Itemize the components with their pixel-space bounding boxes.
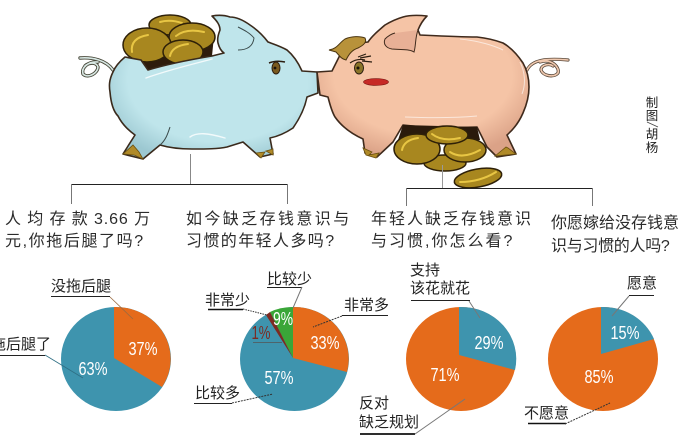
pink pig tail	[527, 59, 568, 76]
pie 2 label: many: 比较多	[195, 384, 240, 402]
blue pig ear line	[160, 27, 254, 145]
pie chart 2	[240, 307, 349, 411]
question 4: 识与习惯的人吗?	[551, 237, 670, 255]
pink pig ear line	[384, 30, 418, 52]
pie 2 label: very few	[205, 292, 267, 315]
pie 3 label: oppose: 缺乏规划	[359, 414, 419, 431]
credit: illustrator: 杨	[646, 140, 658, 155]
pie chart 3: 71%	[430, 365, 460, 385]
credit: illustrator: 胡	[646, 128, 658, 142]
bracket: right connector	[406, 165, 593, 206]
pie chart 2: 33%	[310, 333, 340, 353]
pie chart 2: 9%	[273, 309, 293, 329]
pie 2 label: many	[194, 384, 273, 404]
pie 2 label: very many: 非常多	[344, 297, 389, 314]
pink pig eye	[350, 54, 372, 74]
question 3: 与习惯,你怎么看?	[371, 232, 514, 250]
pie 4 label: willing: 愿意	[627, 274, 657, 292]
pie 3 label: support: 支持	[410, 262, 440, 279]
blue pig body	[109, 15, 318, 159]
pink pig body	[317, 15, 529, 157]
blue pig highlights	[146, 59, 225, 138]
pink pig coins	[394, 126, 503, 191]
blue pig hooves	[123, 145, 273, 159]
pink pig hair	[329, 37, 366, 60]
pie 1 label: not behind: 没拖后腿	[51, 278, 111, 295]
question 1: 元,你拖后腿了吗?	[5, 232, 145, 250]
question 4: 你愿嫁给没存钱意	[551, 213, 679, 232]
pie chart 1: 63%	[78, 359, 108, 379]
pie 2 label: few: 比较少	[267, 270, 312, 288]
question 2: 习惯的年轻人多吗?	[186, 232, 336, 250]
icon: blue piggy bank	[80, 15, 318, 159]
pie 3 label: support	[410, 262, 480, 318]
question 3: 年轻人缺乏存钱意识	[371, 209, 533, 228]
pie 4 label: willing	[612, 274, 657, 316]
pie 2 label: very few: 非常少	[205, 292, 250, 309]
pie 3 label: support: 该花就花	[410, 280, 470, 297]
icon: pink piggy bank	[317, 15, 568, 191]
pie chart 3	[406, 307, 516, 411]
pie chart 4: 85%	[584, 367, 614, 387]
pie chart 2: 57%	[264, 368, 294, 388]
pie 4 label: unwilling	[524, 403, 610, 424]
pie 2 label: few	[267, 270, 312, 308]
pink pig coin cavity	[398, 125, 480, 140]
credit: illustrator: 制	[646, 96, 658, 110]
credit: illustrator: 图	[646, 109, 658, 123]
pie chart 2: 1%	[252, 323, 270, 343]
pie 3 label: oppose	[359, 395, 465, 434]
blue pig coins	[123, 15, 215, 64]
pie chart 4: 15%	[610, 323, 640, 343]
credit: illustrator	[646, 96, 658, 155]
pink pig highlights and ear	[405, 39, 524, 118]
pie chart 3: 29%	[474, 333, 504, 353]
question 1: 人 均 存 款 3.66 万	[5, 210, 151, 228]
blue pig coin cavity	[128, 36, 214, 70]
pie chart 1	[45, 297, 171, 411]
blue pig eye	[269, 61, 285, 74]
blue pig tail	[80, 58, 113, 76]
pink pig hooves	[363, 147, 516, 158]
question 2: 如今缺乏存钱意识与	[186, 209, 352, 228]
pie chart 1: 37%	[128, 339, 158, 359]
pink pig lips	[364, 79, 388, 85]
bracket: left connector	[72, 154, 288, 204]
pie 3 label: oppose: 反对	[359, 395, 389, 412]
pie 4 label: unwilling: 不愿意	[524, 404, 569, 422]
pie chart 4	[548, 307, 658, 411]
pie 2 label: very many	[313, 297, 389, 327]
